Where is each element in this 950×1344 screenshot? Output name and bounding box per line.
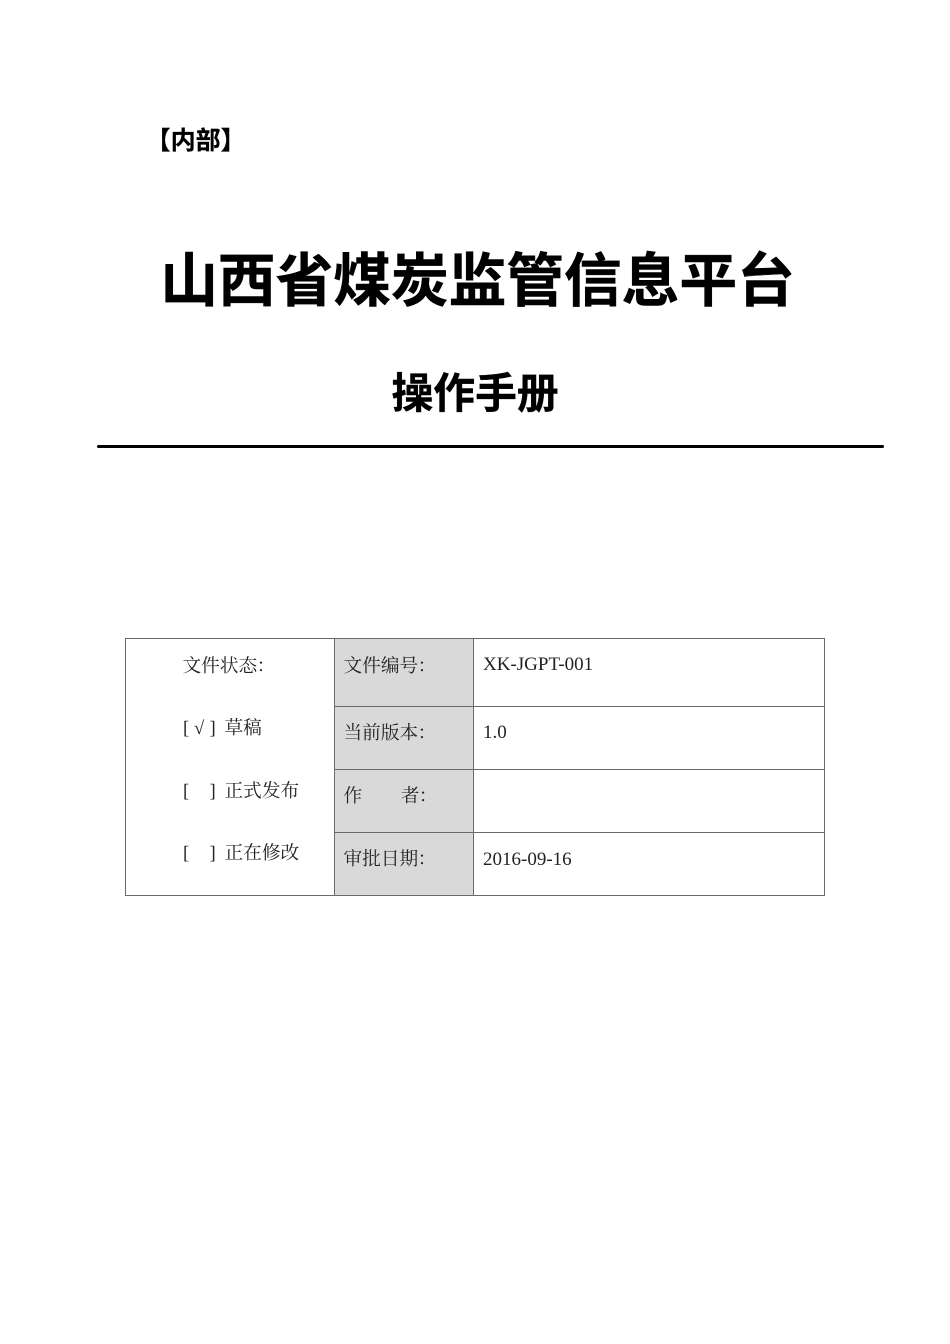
status editing (183, 843, 299, 864)
row line three (334, 832, 824, 833)
classification label: 【内部】 (146, 127, 246, 155)
subtitle: 操作手册 (392, 370, 559, 417)
value document number: XK-JGPT-001 (483, 654, 593, 675)
column line one (334, 638, 335, 896)
status editing: 正在修改 (224, 843, 299, 864)
status editing: ] (210, 843, 216, 864)
row line one (334, 706, 824, 707)
status draft: 草稿 (224, 718, 262, 739)
row line two (334, 769, 824, 770)
label version: 当前版本： (344, 723, 436, 744)
status draft: [ (183, 718, 189, 739)
status draft: ] (210, 718, 216, 739)
title divider (97, 445, 884, 448)
file status heading: 文件状态： (182, 656, 275, 677)
label author: 作 者： (344, 786, 437, 807)
table outer border (125, 638, 825, 896)
title: 山西省煤炭监管信息平台 (160, 250, 795, 314)
value version: 1.0 (483, 722, 507, 743)
column line two (473, 638, 474, 896)
status released: 正式发布 (224, 781, 299, 802)
label document number: 文件编号： (344, 656, 436, 677)
value approval date: 2016-09-16 (483, 849, 572, 870)
status draft: √ (194, 718, 204, 739)
grey label column (334, 638, 474, 895)
status released: [ (183, 781, 189, 802)
document info table (125, 638, 825, 896)
status released (183, 780, 299, 802)
status draft (183, 718, 262, 739)
status editing: [ (183, 843, 189, 864)
label approval date: 审批日期： (344, 849, 436, 870)
status released: ] (210, 781, 216, 802)
